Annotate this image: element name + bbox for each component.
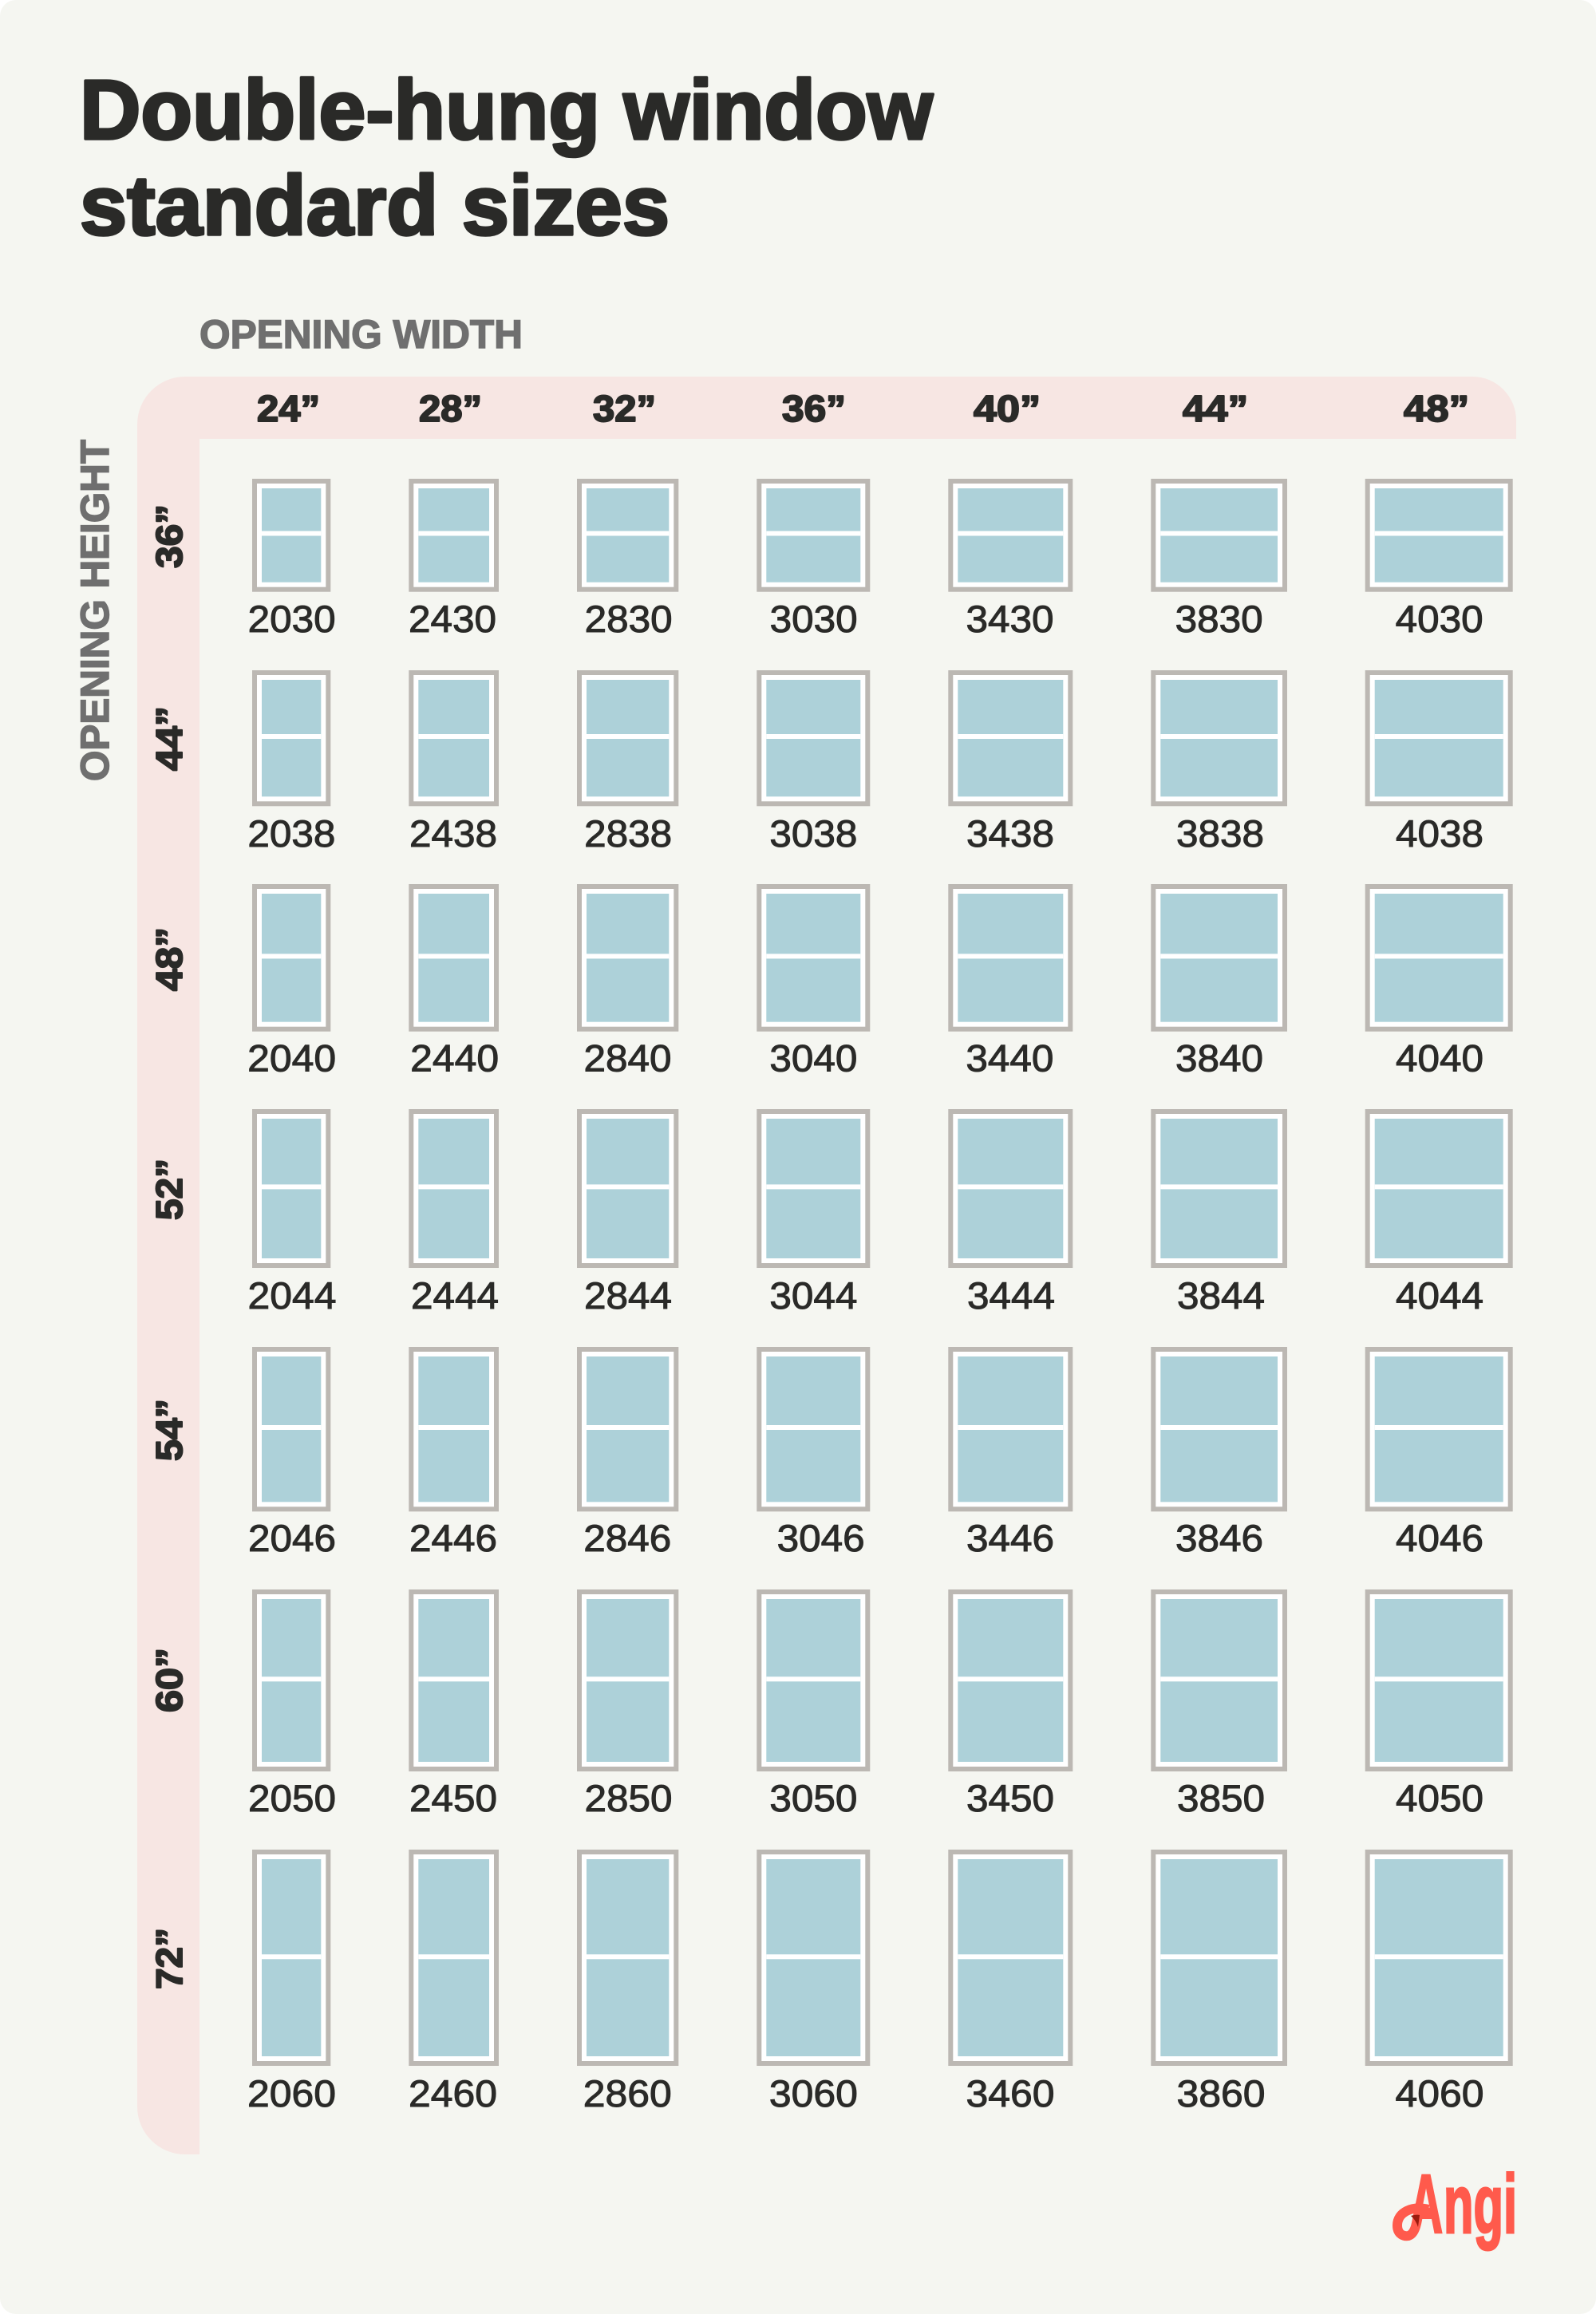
height labels: 54” bbox=[148, 1399, 190, 1461]
window 3438 bbox=[950, 673, 1070, 855]
logo: Angi: ngi bbox=[1444, 2158, 1517, 2251]
window 2440: 2440 bbox=[410, 1037, 499, 1080]
window 4044 bbox=[1368, 1112, 1511, 1317]
window 3046: 3046 bbox=[777, 1517, 865, 1559]
window 4038 bbox=[1368, 673, 1511, 855]
window 2850 bbox=[579, 1592, 676, 1819]
window 4046 bbox=[1368, 1349, 1511, 1559]
window 4040: 4040 bbox=[1396, 1037, 1483, 1080]
axis band bbox=[137, 377, 1516, 2154]
window 3038 bbox=[759, 673, 867, 855]
window 3846 bbox=[1153, 1349, 1285, 1559]
window 2844: 2844 bbox=[584, 1274, 672, 1317]
logo: Angi bbox=[1397, 2158, 1517, 2251]
window 2450: 2450 bbox=[409, 1777, 497, 1819]
window 2038 bbox=[247, 673, 335, 855]
window 3440 bbox=[950, 887, 1070, 1080]
width labels: 32” bbox=[593, 388, 656, 429]
window 2460: 2460 bbox=[409, 2072, 497, 2115]
title bbox=[80, 63, 934, 253]
window 2430 bbox=[409, 481, 496, 640]
window 2860: 2860 bbox=[583, 2072, 672, 2115]
window 2846: 2846 bbox=[583, 1517, 671, 1559]
title: standard sizes bbox=[80, 159, 670, 253]
window 2444 bbox=[411, 1112, 499, 1317]
window 2438 bbox=[409, 673, 497, 855]
window 3838 bbox=[1153, 673, 1285, 855]
window 2430: 2430 bbox=[409, 598, 496, 640]
window 3840: 3840 bbox=[1175, 1037, 1263, 1080]
window 4038: 4038 bbox=[1396, 812, 1483, 855]
window 2838 bbox=[579, 673, 676, 855]
window 3830 bbox=[1153, 481, 1285, 640]
window 3030 bbox=[759, 481, 867, 640]
window 3830: 3830 bbox=[1175, 598, 1263, 640]
height labels: 48” bbox=[148, 927, 190, 991]
window 3844: 3844 bbox=[1177, 1274, 1265, 1317]
window 3050 bbox=[759, 1592, 867, 1819]
window 2446: 2446 bbox=[409, 1517, 497, 1559]
window 3030: 3030 bbox=[770, 598, 858, 640]
window 3044: 3044 bbox=[769, 1274, 857, 1317]
window 2050 bbox=[248, 1592, 336, 1819]
window 4040 bbox=[1368, 887, 1511, 1080]
window 2450 bbox=[409, 1592, 497, 1819]
window 3430 bbox=[950, 481, 1070, 640]
window 2438: 2438 bbox=[409, 812, 497, 855]
window 3444 bbox=[950, 1112, 1070, 1317]
window 2044: 2044 bbox=[247, 1274, 337, 1317]
window 2860 bbox=[579, 1852, 676, 2115]
logo: Angi: A bbox=[1409, 2158, 1443, 2251]
axis title: opening height: OPENING HEIGHT bbox=[73, 440, 117, 781]
window 3844 bbox=[1153, 1112, 1285, 1317]
window 3446: 3446 bbox=[966, 1517, 1054, 1559]
window 3850: 3850 bbox=[1177, 1777, 1265, 1819]
window 3438: 3438 bbox=[966, 812, 1054, 855]
window 2046: 2046 bbox=[248, 1517, 336, 1559]
window 2440 bbox=[410, 887, 499, 1080]
window 3450: 3450 bbox=[966, 1777, 1054, 1819]
window 3060: 3060 bbox=[769, 2072, 858, 2115]
width labels bbox=[257, 388, 1469, 429]
height labels: 52” bbox=[148, 1159, 190, 1220]
window 2840 bbox=[579, 887, 676, 1080]
window 3040 bbox=[759, 887, 867, 1080]
window 4050: 4050 bbox=[1396, 1777, 1483, 1819]
width labels: 40” bbox=[974, 388, 1041, 429]
window 2040 bbox=[247, 887, 336, 1080]
window 2844 bbox=[579, 1112, 676, 1317]
window 3440: 3440 bbox=[966, 1037, 1053, 1080]
window 4044: 4044 bbox=[1396, 1274, 1483, 1317]
window 3050: 3050 bbox=[769, 1777, 857, 1819]
window 2846 bbox=[579, 1349, 676, 1559]
width labels: 24” bbox=[257, 388, 320, 429]
window 3430: 3430 bbox=[966, 598, 1053, 640]
window 3450 bbox=[950, 1592, 1070, 1819]
window 2840: 2840 bbox=[584, 1037, 672, 1080]
width labels: 44” bbox=[1183, 388, 1248, 429]
window 2050: 2050 bbox=[248, 1777, 336, 1819]
window 2038: 2038 bbox=[247, 812, 335, 855]
window 3846: 3846 bbox=[1175, 1517, 1263, 1559]
height labels: 36” bbox=[148, 504, 190, 568]
window 2030: 2030 bbox=[248, 598, 336, 640]
window 4050 bbox=[1368, 1592, 1511, 1819]
window 2044 bbox=[247, 1112, 337, 1317]
window 3840 bbox=[1153, 887, 1285, 1080]
width labels: 28” bbox=[419, 388, 482, 429]
axis title: opening width: OPENING WIDTH bbox=[200, 312, 523, 357]
window 3040: 3040 bbox=[769, 1037, 857, 1080]
window 3038: 3038 bbox=[769, 812, 857, 855]
window 3860: 3860 bbox=[1176, 2072, 1266, 2115]
window 3060 bbox=[759, 1852, 867, 2115]
window 2830 bbox=[579, 481, 676, 640]
height labels bbox=[148, 504, 190, 1989]
window 3044 bbox=[759, 1112, 867, 1317]
window 2460 bbox=[409, 1852, 497, 2115]
width labels: 48” bbox=[1404, 388, 1469, 429]
window 4060 bbox=[1368, 1852, 1511, 2115]
height labels: 60” bbox=[148, 1648, 190, 1712]
window 2830: 2830 bbox=[585, 598, 673, 640]
window 4030 bbox=[1368, 481, 1511, 640]
window 2060 bbox=[247, 1852, 336, 2115]
window 3850 bbox=[1153, 1592, 1285, 1819]
window 2444: 2444 bbox=[411, 1274, 499, 1317]
window 2040: 2040 bbox=[247, 1037, 336, 1080]
width labels: 36” bbox=[782, 388, 846, 429]
window 3446 bbox=[950, 1349, 1070, 1559]
window 3046 bbox=[759, 1349, 867, 1559]
window 2446 bbox=[409, 1349, 497, 1559]
window 3460: 3460 bbox=[966, 2072, 1055, 2115]
window 3444: 3444 bbox=[967, 1274, 1055, 1317]
window 2060: 2060 bbox=[247, 2072, 336, 2115]
window 2850: 2850 bbox=[584, 1777, 672, 1819]
window 3838: 3838 bbox=[1176, 812, 1264, 855]
window 3860 bbox=[1153, 1852, 1285, 2115]
window 4046: 4046 bbox=[1396, 1517, 1483, 1559]
window 2838: 2838 bbox=[584, 812, 672, 855]
window 3460 bbox=[950, 1852, 1070, 2115]
window 2030 bbox=[248, 481, 336, 640]
title: Double-hung window bbox=[80, 63, 934, 157]
window 2046 bbox=[248, 1349, 336, 1559]
window 4060: 4060 bbox=[1395, 2072, 1484, 2115]
window 4030: 4030 bbox=[1396, 598, 1483, 640]
height labels: 72” bbox=[148, 1928, 190, 1989]
height labels: 44” bbox=[148, 706, 190, 771]
